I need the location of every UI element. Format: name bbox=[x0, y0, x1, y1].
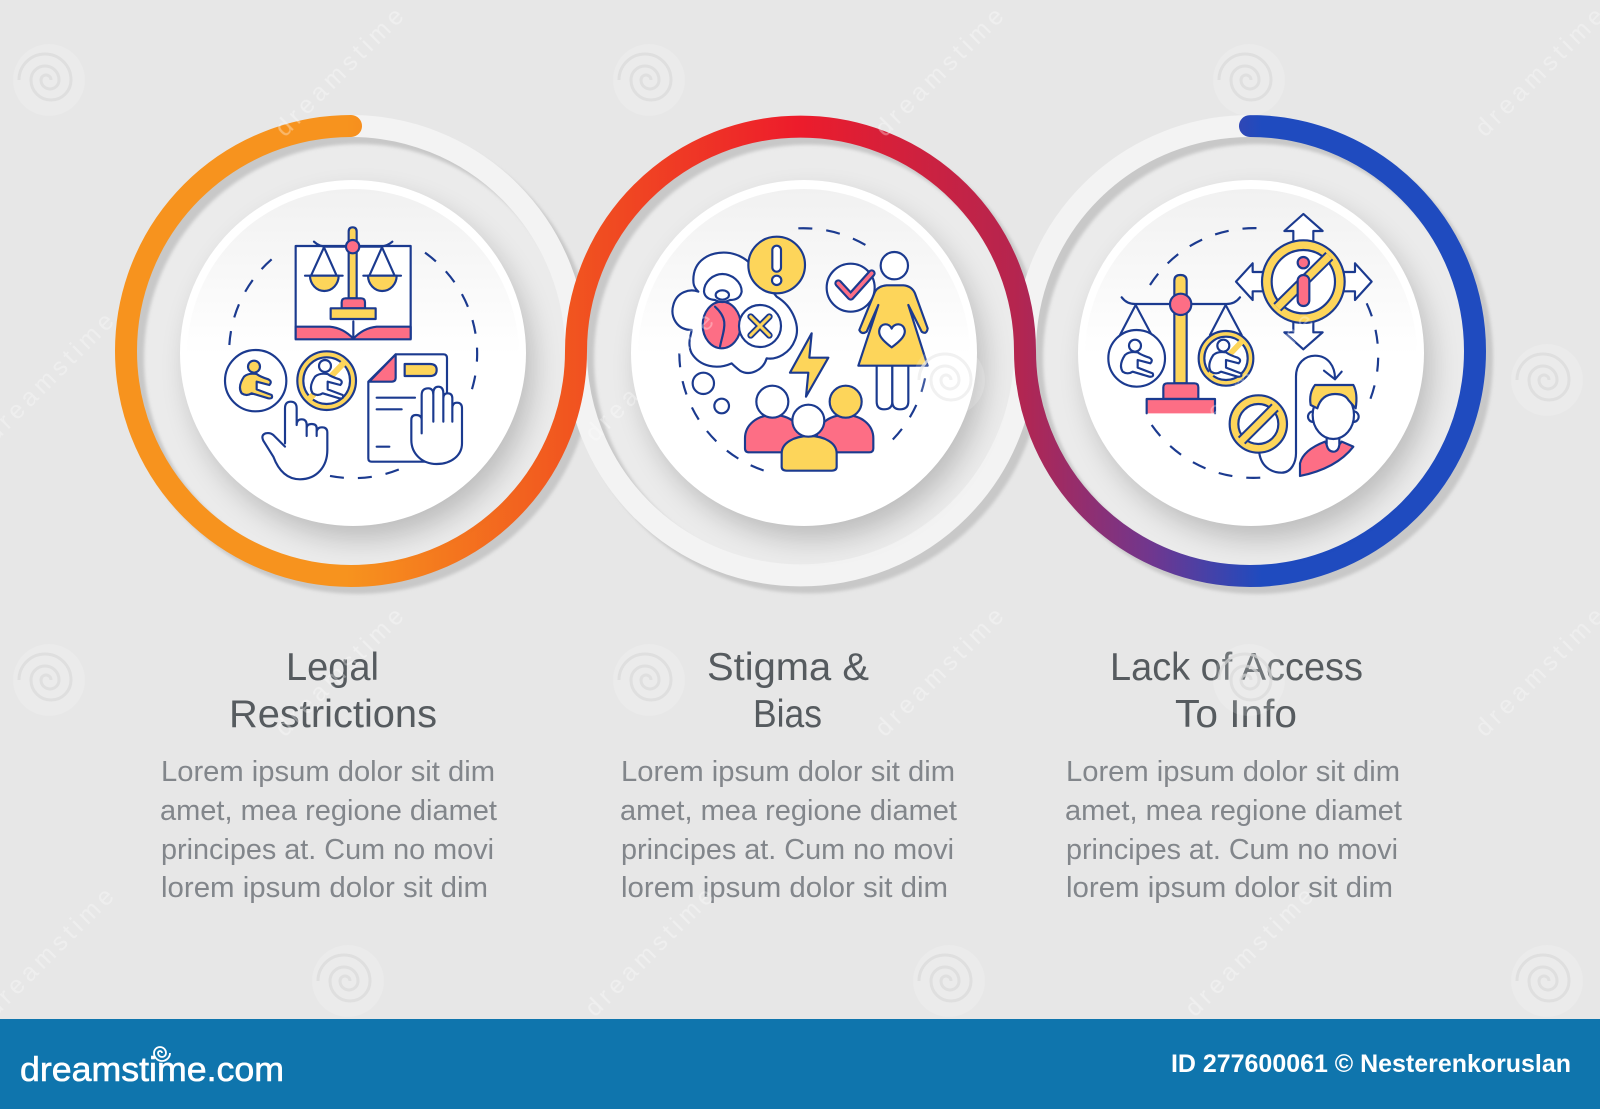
heading: stigma and bias: Bias bbox=[753, 693, 822, 736]
watermark text: dreamstime bbox=[579, 882, 719, 1022]
logo wordmark: dreamstime.com bbox=[20, 1051, 284, 1089]
panel: lack of access disc bbox=[1078, 180, 1431, 539]
text block: stigma and bias: lorem ipsum dolor sit dim bbox=[621, 872, 948, 904]
icon: child in circle bbox=[225, 350, 286, 411]
panel: legal restrictions disc bbox=[180, 180, 533, 539]
gradient flow ribbon bbox=[126, 126, 1475, 576]
child in circle bbox=[1108, 330, 1165, 387]
text block: lack of access bbox=[1065, 756, 1402, 904]
text block: legal restrictions: Lorem ipsum dolor sit dim bbox=[161, 756, 495, 788]
text block: lack of access: Lorem ipsum dolor sit dim bbox=[1066, 756, 1400, 788]
watermark text: dreamstime bbox=[869, 602, 1009, 742]
flow ribbon shadow bbox=[133, 133, 1482, 583]
text block: lack of access: lorem ipsum dolor sit dim bbox=[1066, 872, 1393, 904]
rejected badge bbox=[739, 305, 781, 347]
thought bubbles bbox=[693, 373, 729, 413]
curved arrow bbox=[1259, 356, 1342, 473]
icon: lack of access bbox=[1108, 214, 1378, 478]
icon: prohibited child bbox=[297, 351, 356, 410]
ban symbol bbox=[1230, 395, 1287, 453]
heading: lack of access bbox=[1110, 646, 1363, 736]
watermark text: dreamstime bbox=[1179, 882, 1319, 1022]
icon: document bbox=[368, 354, 447, 462]
text block: lack of access: amet, mea regione diamet bbox=[1065, 795, 1402, 827]
baby bbox=[703, 274, 742, 348]
heading: legal restrictions bbox=[229, 646, 437, 736]
text block: legal restrictions: amet, mea regione diamet bbox=[160, 795, 497, 827]
inner ring areas bbox=[137, 137, 1464, 565]
panel: stigma and bias disc bbox=[631, 180, 984, 539]
pregnant woman bbox=[827, 252, 928, 409]
direction arrows bbox=[1236, 214, 1372, 349]
text block: legal restrictions bbox=[160, 756, 497, 904]
group of people bbox=[745, 386, 873, 471]
open book bbox=[296, 246, 411, 339]
heading: stigma and bias bbox=[707, 646, 869, 736]
text block: legal restrictions: lorem ipsum dolor sit dim bbox=[161, 872, 488, 904]
text block: stigma and bias: principes at. Cum no movi bbox=[621, 834, 954, 866]
alert badge bbox=[748, 237, 805, 293]
icon: stop hand bbox=[411, 387, 462, 464]
heading: legal restrictions: Restrictions bbox=[229, 693, 437, 736]
watermark text: dreamstime bbox=[869, 2, 1009, 142]
thought cloud bbox=[672, 253, 797, 373]
unfilled track arcs bbox=[351, 126, 1250, 575]
image id and author: ID 277600061 © Nesterenkoruslan bbox=[1171, 1050, 1571, 1078]
watermark text: dreamstime bbox=[579, 307, 719, 447]
balance scale bbox=[1120, 275, 1242, 413]
footer bar bbox=[0, 1019, 1600, 1109]
dashed circle bbox=[229, 253, 477, 478]
no information symbol bbox=[1262, 240, 1345, 323]
watermark text: dreamstime bbox=[269, 2, 409, 142]
icon: pointing hand bbox=[262, 402, 327, 479]
heading: lack of access: To Info bbox=[1175, 693, 1297, 736]
icon: lightning bolt bbox=[790, 333, 828, 397]
scales of justice bbox=[305, 227, 401, 319]
watermark text: dreamstime bbox=[1179, 307, 1319, 447]
icon: stigma and bias bbox=[672, 228, 928, 472]
icon: legal restrictions bbox=[225, 227, 477, 479]
text block: stigma and bias: Lorem ipsum dolor sit dim bbox=[621, 756, 955, 788]
text block: legal restrictions: principes at. Cum no movi bbox=[161, 834, 494, 866]
dashed circle bbox=[1150, 228, 1378, 478]
text block: stigma and bias: amet, mea regione diamet bbox=[620, 795, 957, 827]
dashed circle bbox=[679, 228, 925, 472]
watermark text: dreamstime bbox=[269, 602, 409, 742]
heading: lack of access: Lack of Access bbox=[1110, 646, 1363, 689]
heading: stigma and bias: Stigma & bbox=[707, 646, 869, 689]
prohibited child bbox=[1199, 331, 1253, 386]
text block: lack of access: principes at. Cum no movi bbox=[1066, 834, 1398, 866]
heading: legal restrictions: Legal bbox=[286, 646, 379, 689]
person bbox=[1300, 385, 1359, 476]
text block: stigma and bias bbox=[620, 756, 957, 904]
